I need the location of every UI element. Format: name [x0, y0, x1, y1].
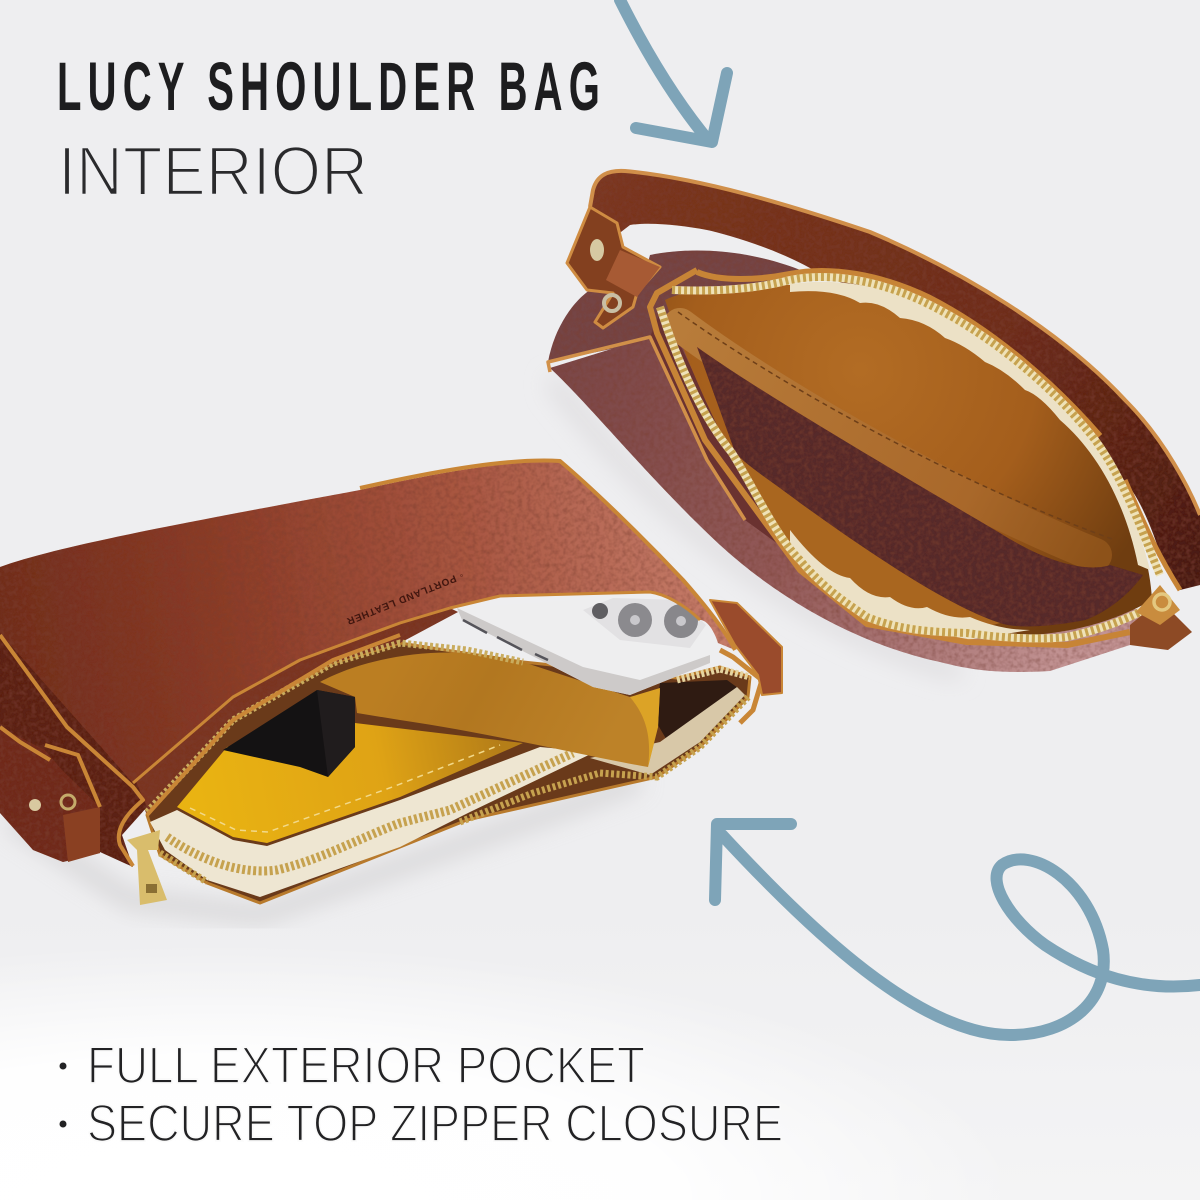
bullet: secure top zipper closure: SECURE TOP ZIPPER CLOSURE	[87, 1095, 783, 1153]
cream tape	[150, 747, 595, 897]
bottom cream zipper tape	[790, 530, 1030, 640]
ring	[61, 795, 75, 809]
tan rim	[650, 270, 1130, 645]
zipper teeth top	[660, 277, 1160, 638]
shadow	[10, 780, 640, 915]
interior base	[147, 643, 750, 903]
bullet: full exterior pocket: FULL EXTERIOR POCKET	[87, 1037, 645, 1095]
interior suede	[665, 285, 1152, 636]
yellow pouch	[177, 723, 523, 843]
strap tab	[567, 207, 660, 328]
left gusset	[0, 620, 147, 867]
heading: product name: LUCY SHOULDER BAG	[57, 48, 600, 125]
leather body	[0, 462, 735, 783]
zipper teeth bottom	[660, 307, 1150, 638]
left strap tab	[0, 727, 100, 862]
front zipper teeth	[167, 753, 573, 871]
right corner hardware	[1130, 600, 1192, 650]
back zipper teeth	[460, 697, 748, 822]
soft shadow	[552, 380, 960, 672]
bag: open interior view	[548, 171, 1200, 672]
camera lenses	[583, 598, 706, 648]
top zipper teeth	[147, 643, 523, 812]
tan pouch	[320, 652, 660, 767]
lower zipper teeth	[160, 853, 207, 882]
lower suede lip	[735, 452, 1000, 632]
rivet	[29, 799, 41, 811]
leather edges	[0, 461, 762, 866]
lower panel	[550, 307, 1150, 672]
deboss mark: ◦ PORTLAND LEATHER	[344, 569, 465, 626]
side gusset strip	[650, 307, 800, 560]
zipper pull	[127, 830, 167, 905]
black box	[223, 690, 355, 777]
subheading: interior: INTERIOR	[58, 132, 368, 210]
seam band	[680, 325, 1095, 555]
ring	[604, 295, 620, 311]
strap	[590, 171, 1200, 590]
arrow: curly pointing to pocket bag	[715, 824, 1200, 1035]
arrow: top pointing to open bag	[620, 0, 727, 142]
bag: front view with exterior pocket	[0, 461, 782, 915]
right strap tab	[710, 600, 782, 695]
bullet list	[60, 1037, 783, 1153]
upper gusset	[548, 251, 810, 362]
interior dark leather band	[697, 347, 1143, 626]
inner zipper band	[133, 608, 458, 815]
phone	[457, 598, 718, 695]
panel edge	[548, 337, 745, 520]
rivet	[590, 239, 604, 261]
top cream zipper tape	[790, 282, 1150, 570]
back lining	[655, 680, 738, 742]
